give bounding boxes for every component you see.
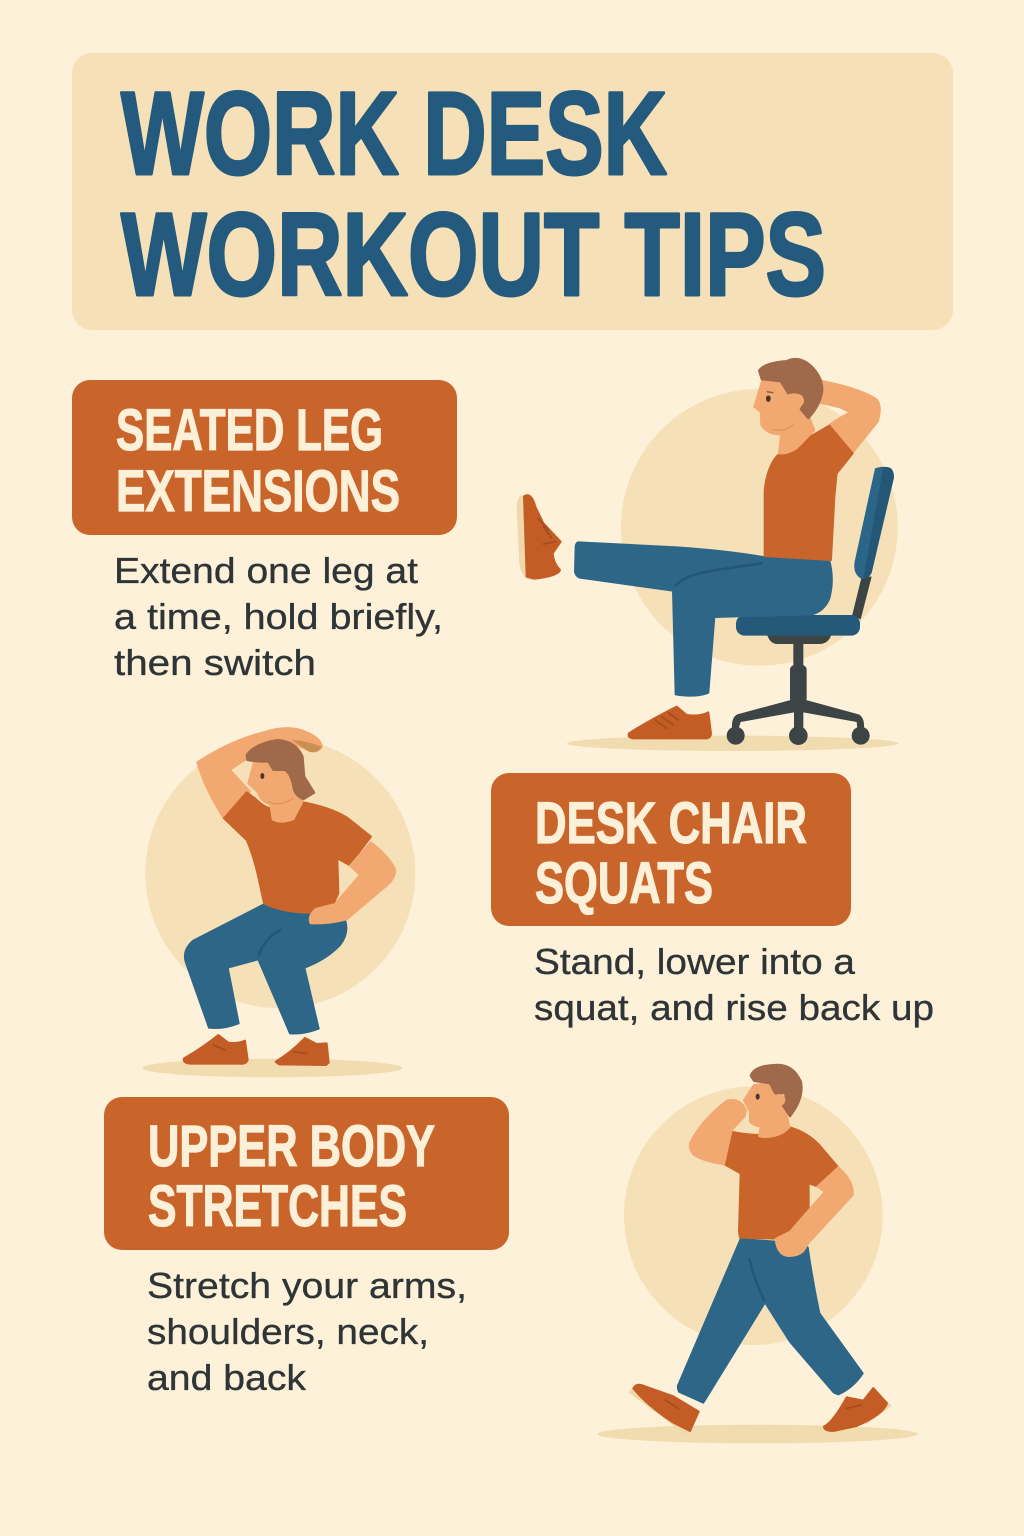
heading: seated leg extensions: EXTENSIONS — [116, 459, 400, 524]
text: upper body stretches description: Stretch your arms, — [147, 1265, 467, 1306]
text: seated leg extensions description: then switch — [114, 642, 316, 683]
shoe on floor — [629, 707, 711, 738]
arm behind head — [820, 381, 880, 453]
arms — [690, 1100, 853, 1256]
title — [121, 68, 826, 321]
title banner — [72, 53, 953, 330]
raised shoe — [517, 495, 561, 580]
text: desk chair squats description: Stand, lower into a — [534, 941, 856, 982]
text: upper body stretches description: shoulders, neck, — [147, 1311, 429, 1352]
heading: upper body stretches: UPPER BODY — [148, 1114, 435, 1179]
chair — [727, 467, 894, 745]
text: seated leg extensions description: a time, hold briefly, — [114, 596, 443, 637]
text: desk chair squats description: squat, and rise back up — [534, 987, 934, 1028]
side arm — [310, 842, 395, 923]
head — [247, 740, 314, 822]
illustration: man walking with hand to face — [598, 1065, 918, 1443]
heading: seated leg extensions: SEATED LEG — [116, 398, 383, 463]
shirt — [224, 792, 371, 913]
illustration: man doing seated leg extension on chair — [517, 359, 898, 751]
trousers — [185, 905, 346, 1033]
title: WORK DESK — [121, 68, 667, 200]
heading: seated leg extensions — [116, 398, 400, 524]
text: upper body stretches description: and back — [147, 1357, 307, 1398]
illustration: man squatting with arm overhead — [142, 728, 415, 1077]
panel: seated leg extensions — [72, 380, 457, 535]
title: WORKOUT TIPS — [121, 189, 826, 321]
heading: upper body stretches: STRETCHES — [148, 1174, 407, 1239]
head — [744, 1065, 802, 1137]
head — [754, 359, 822, 453]
heading: desk chair squats: DESK CHAIR — [535, 791, 807, 856]
trousers — [575, 542, 832, 696]
shirt — [725, 1127, 838, 1239]
text: desk chair squats description — [534, 941, 934, 1028]
panel: desk chair squats — [491, 773, 851, 926]
panel: upper body stretches — [104, 1097, 509, 1250]
text: upper body stretches description — [147, 1265, 467, 1398]
text: seated leg extensions description — [114, 550, 443, 683]
text: seated leg extensions description: Extend one leg at — [114, 550, 418, 591]
heading: upper body stretches — [148, 1114, 435, 1239]
shoes — [629, 1385, 891, 1434]
raised arm — [197, 728, 322, 818]
heading: desk chair squats: SQUATS — [535, 851, 713, 916]
heading: desk chair squats — [535, 791, 807, 916]
trousers — [678, 1239, 863, 1403]
shoes — [184, 1035, 329, 1065]
shirt — [765, 426, 853, 560]
